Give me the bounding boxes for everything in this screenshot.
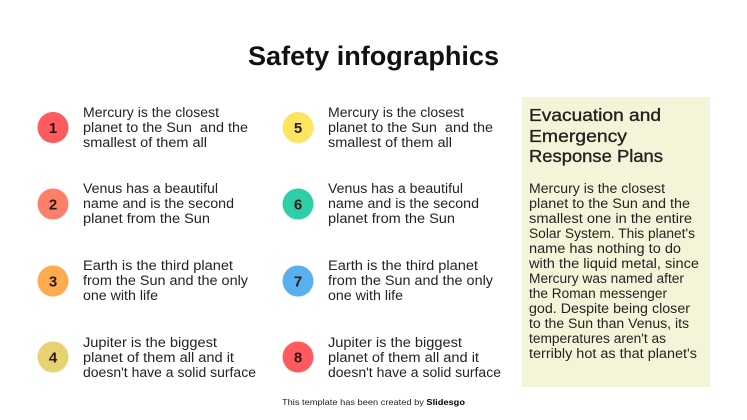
text: item 5 description [328, 105, 493, 150]
icon: number 7 badge: 7 [294, 274, 302, 290]
icon: number 1 badge [38, 112, 68, 143]
panel body text: with the liquid metal, since [528, 256, 699, 271]
icon: number 4 badge: 4 [49, 350, 58, 366]
icon: number 2 badge [38, 188, 68, 220]
text: item 7 description: Earth is the third planet [328, 258, 478, 273]
panel body text: temperatures aren't as [529, 331, 666, 346]
text: item 3 description: Earth is the third planet [83, 258, 233, 273]
item 4 [38, 335, 256, 380]
icon: number 3 badge: 3 [49, 274, 57, 290]
panel heading: Response Plans [529, 146, 663, 166]
icon: number 2 badge: 2 [49, 196, 57, 214]
icon: number 8 badge [282, 342, 314, 372]
item 6 [282, 181, 479, 226]
text: item 6 description: planet from the Sun [328, 211, 455, 226]
item 5 [282, 105, 493, 150]
text: item 6 description [328, 181, 479, 226]
item 7 [282, 258, 493, 303]
text: item 1 description: planet to the Sun and the [83, 120, 248, 135]
panel background [522, 97, 710, 387]
icon: number 4 badge [38, 342, 68, 372]
icon: number 8 badge: 8 [294, 350, 302, 366]
panel body text: Mercury was named after [529, 271, 685, 286]
panel body text [528, 181, 699, 361]
panel body text: smallest one in the entire [529, 211, 692, 226]
panel: evacuation plans [522, 97, 710, 387]
icon: number 3 badge [38, 266, 68, 296]
text: item 7 description: from the Sun and the only [328, 273, 493, 288]
text: item 4 description [83, 335, 256, 380]
text: item 8 description: Jupiter is the biggest [328, 335, 462, 350]
icon: number 5 badge [282, 112, 314, 143]
icon: number 7 badge [282, 266, 314, 296]
text: item 2 description [83, 181, 234, 226]
text: item 7 description: one with life [328, 288, 403, 303]
text: item 2 description: planet from the Sun [83, 211, 210, 226]
text: item 8 description [328, 335, 501, 380]
panel heading: Emergency [529, 126, 627, 146]
panel body text: name has nothing to do [529, 241, 681, 256]
text: item 2 description: name and is the second [83, 196, 234, 211]
text: item 4 description: doesn't have a solid surface [83, 365, 256, 380]
text: item 3 description: one with life [83, 288, 158, 303]
panel body text: god. Despite being closer [529, 301, 691, 316]
icon: number 5 badge: 5 [294, 120, 302, 137]
text: item 5 description: Mercury is the closest [328, 105, 464, 120]
text: item 3 description: from the Sun and the only [83, 273, 248, 288]
item 1 [38, 105, 248, 150]
text: item 6 description: Venus has a beautiful [328, 181, 463, 196]
text: item 3 description [83, 258, 248, 303]
panel body text: to the Sun than Venus, its [529, 316, 689, 331]
text: item 5 description: planet to the Sun and the [328, 120, 493, 135]
panel body text: the Roman messenger [529, 286, 668, 301]
icon: number 6 badge [282, 188, 314, 220]
text: item 1 description: smallest of them all [83, 135, 207, 150]
item 3 [38, 258, 248, 303]
item 2 [38, 181, 234, 226]
text: item 7 description [328, 258, 493, 303]
text: item 8 description: doesn't have a solid surface [328, 365, 501, 380]
icon: number 1 badge: 1 [49, 120, 57, 137]
text: item 8 description: planet of them all and it [328, 350, 479, 365]
title: Safety infographics [248, 41, 499, 71]
text: item 4 description: planet of them all and it [83, 350, 234, 365]
panel body text: Solar System. This planet's [529, 226, 695, 241]
icon: number 6 badge: 6 [294, 196, 302, 214]
panel body text: planet to the Sun and the [529, 196, 690, 211]
text: item 4 description: Jupiter is the biggest [83, 335, 217, 350]
panel body text: Mercury is the closest [529, 181, 665, 196]
panel heading [529, 105, 663, 166]
text: item 1 description [83, 105, 248, 150]
text: item 5 description: smallest of them all [328, 135, 452, 150]
text: item 1 description: Mercury is the closest [83, 105, 219, 120]
panel heading: Evacuation and [529, 105, 661, 125]
panel body text: terribly hot as that planet's [529, 346, 697, 361]
item 8 [282, 335, 501, 380]
footer credit: This template has been created by Slidesgo [282, 397, 465, 407]
text: item 6 description: name and is the second [328, 196, 479, 211]
text: item 2 description: Venus has a beautiful [83, 181, 218, 196]
